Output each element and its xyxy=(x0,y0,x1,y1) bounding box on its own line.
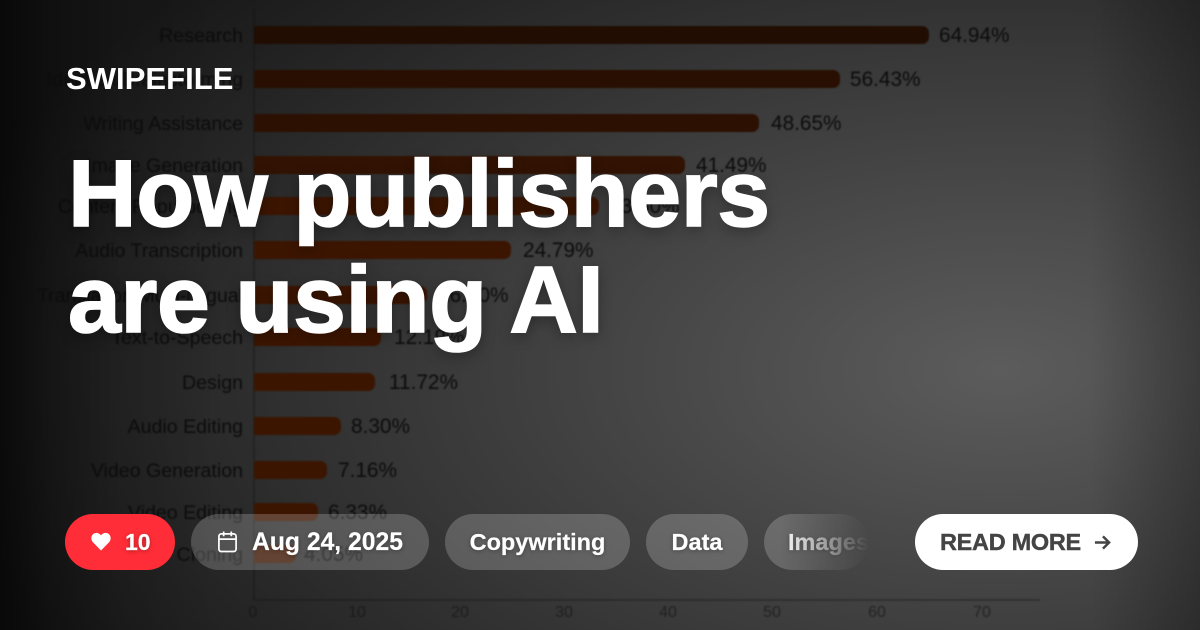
read more button: READ MORE xyxy=(940,529,1081,555)
chart category labels: Ideation/Brainstorming xyxy=(47,69,243,91)
chart category labels: Image Generation xyxy=(86,155,243,177)
chart category labels: Video Generation xyxy=(91,460,243,482)
chart category labels: Audio Transcription xyxy=(75,240,243,262)
tag: Images: Images xyxy=(788,529,869,555)
icon: heart xyxy=(91,532,111,550)
chart category labels: Content Repurposing xyxy=(58,196,243,218)
icon: calendar xyxy=(218,532,237,552)
date pill xyxy=(191,514,429,570)
chart x axis ticks: 60 xyxy=(868,604,886,621)
likes pill xyxy=(65,514,175,570)
chart x axis ticks: 30 xyxy=(555,604,573,621)
chart value labels: 12.19% xyxy=(394,326,465,349)
chart x axis ticks xyxy=(249,604,991,621)
chart x axis ticks: 40 xyxy=(659,604,677,621)
brand label: SWIPEFILE xyxy=(66,61,234,96)
chart value labels: 11.72% xyxy=(389,371,458,394)
chart value labels: 8.30% xyxy=(351,415,410,438)
read more button xyxy=(915,514,1138,570)
tag: Images xyxy=(764,514,869,570)
chart value labels: 41.49% xyxy=(696,154,767,177)
icon: arrow xyxy=(1094,536,1111,550)
chart value labels: 64.94% xyxy=(939,24,1010,47)
chart category labels: Writing Assistance xyxy=(83,113,243,135)
chart value labels xyxy=(304,24,1010,566)
chart value labels: 48.65% xyxy=(771,112,842,135)
chart category labels: Video Editing xyxy=(128,502,243,524)
chart category labels: Audio Editing xyxy=(128,416,243,438)
chart value labels: 6.33% xyxy=(328,501,387,524)
chart x axis ticks: 50 xyxy=(763,604,781,621)
chart value labels: 7.16% xyxy=(338,459,397,482)
chart value labels: 33.50% xyxy=(609,195,680,218)
bar chart xyxy=(56,26,1040,618)
chart category labels: Voice Cloning xyxy=(123,544,243,566)
chart category labels xyxy=(37,25,243,566)
tag: Data xyxy=(646,514,748,570)
chart x axis ticks: 20 xyxy=(451,604,469,621)
chart value labels: 16.50% xyxy=(438,284,509,307)
chart bars xyxy=(240,26,929,563)
chart value labels: 4.05% xyxy=(304,543,363,566)
chart x axis ticks: 10 xyxy=(348,604,366,621)
chart axes xyxy=(254,10,1040,600)
chart category labels: Translation/Multi-lingual xyxy=(37,285,243,307)
chart x axis ticks: 0 xyxy=(249,604,258,621)
tag: Copywriting: Copywriting xyxy=(470,529,605,555)
chart category labels: Research xyxy=(159,25,243,47)
title xyxy=(68,141,770,356)
chart category labels: Text-to-Speech xyxy=(111,327,243,349)
chart category labels: Design xyxy=(182,372,243,394)
date pill: Aug 24, 2025 xyxy=(252,529,403,556)
chart x axis ticks: 70 xyxy=(973,604,991,621)
tag: Data: Data xyxy=(672,529,722,555)
tag: Copywriting xyxy=(445,514,630,570)
likes pill: 10 xyxy=(125,529,151,555)
title: How publishers xyxy=(68,141,770,247)
chart value labels: 24.79% xyxy=(523,239,594,262)
chart value labels: 56.43% xyxy=(850,68,921,91)
title: are using AI xyxy=(68,247,603,353)
